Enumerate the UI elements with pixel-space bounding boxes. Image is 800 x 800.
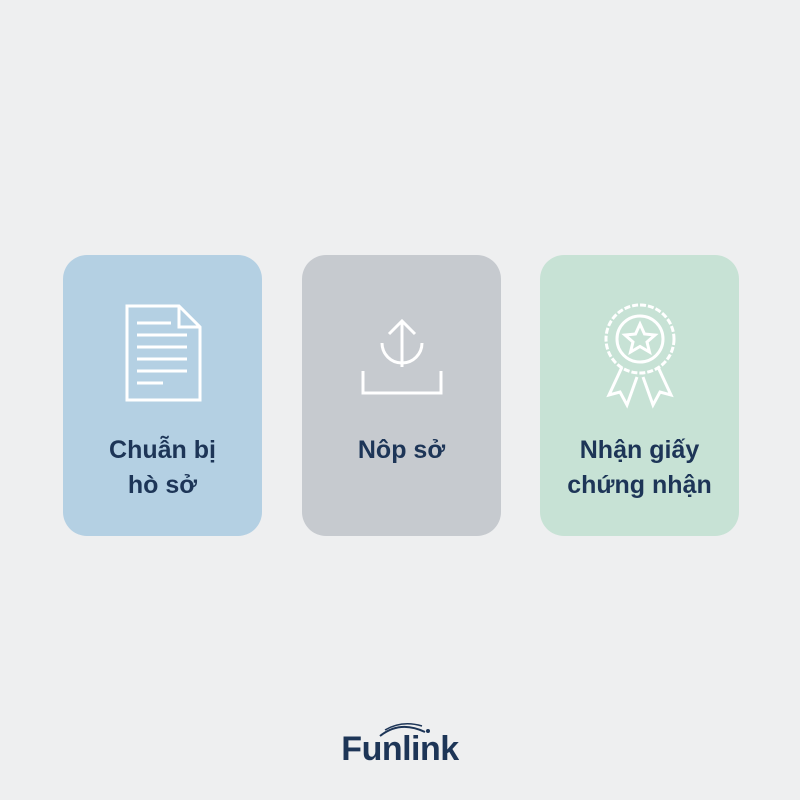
text: step 1: hò sở — [128, 471, 197, 499]
icon: award ribbon — [604, 304, 676, 408]
panel: step 3 — [540, 255, 739, 536]
logo: Funlink: Funlink — [341, 730, 459, 768]
text: step 3 — [567, 436, 712, 499]
text: step 3: chứng nhận — [567, 471, 712, 499]
text: step 3: Nhận giấy — [580, 436, 699, 464]
text: step 1 — [109, 436, 216, 499]
text: step 2: Nôp sở — [358, 436, 445, 464]
icon: document — [126, 304, 202, 402]
icon: upload — [362, 319, 442, 394]
panel: step 2 — [302, 255, 501, 536]
panel: step 1 — [63, 255, 262, 536]
text: step 1: Chuẫn bị — [109, 436, 216, 464]
